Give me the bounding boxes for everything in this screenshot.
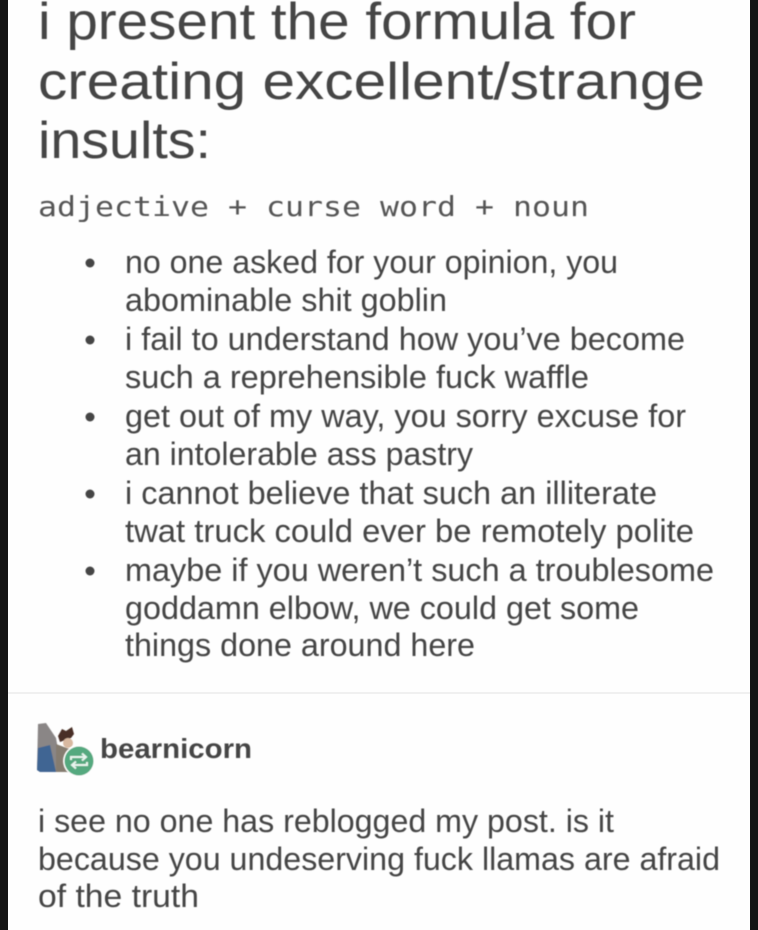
reblog comment: of the truth — [38, 878, 199, 914]
list item 3: get out of my way, you sorry excuse for — [125, 398, 686, 434]
icon: avatar — [37, 723, 74, 772]
list item 4: i cannot believe that such an illiterate — [125, 475, 657, 511]
list item 5 — [86, 552, 714, 663]
list item 5: things done around here — [125, 627, 475, 663]
reblog comment: i see no one has reblogged my post. is it — [38, 803, 614, 839]
bullet list — [86, 244, 714, 663]
list item 2: i fail to understand how you’ve become — [125, 321, 685, 357]
list item 1: abominable shit goblin — [125, 282, 447, 318]
icon: reblog badge — [63, 745, 95, 777]
title: insults: — [38, 112, 211, 170]
list item 2: such a reprehensible fuck waffle — [125, 359, 589, 395]
list item 3 — [86, 398, 686, 472]
list item 1: no one asked for your opinion, you — [125, 244, 618, 280]
reblog comment: because you undeserving fuck llamas are afraid — [38, 841, 720, 877]
list item 2 — [86, 321, 685, 395]
list item 1 — [86, 244, 618, 318]
list item 5: goddamn elbow, we could get some — [125, 590, 639, 626]
list item 4 — [86, 475, 694, 549]
title: creating excellent/strange — [38, 53, 705, 111]
list item 3: an intolerable ass pastry — [125, 436, 474, 472]
list item 4: twat truck could ever be remotely polite — [125, 513, 694, 549]
title — [38, 0, 705, 170]
reblog comment — [38, 803, 720, 914]
formula text: adjective + curse word + noun — [38, 190, 589, 223]
list item 5: maybe if you weren’t such a troublesome — [125, 552, 714, 588]
username: bearnicorn — [100, 733, 252, 764]
